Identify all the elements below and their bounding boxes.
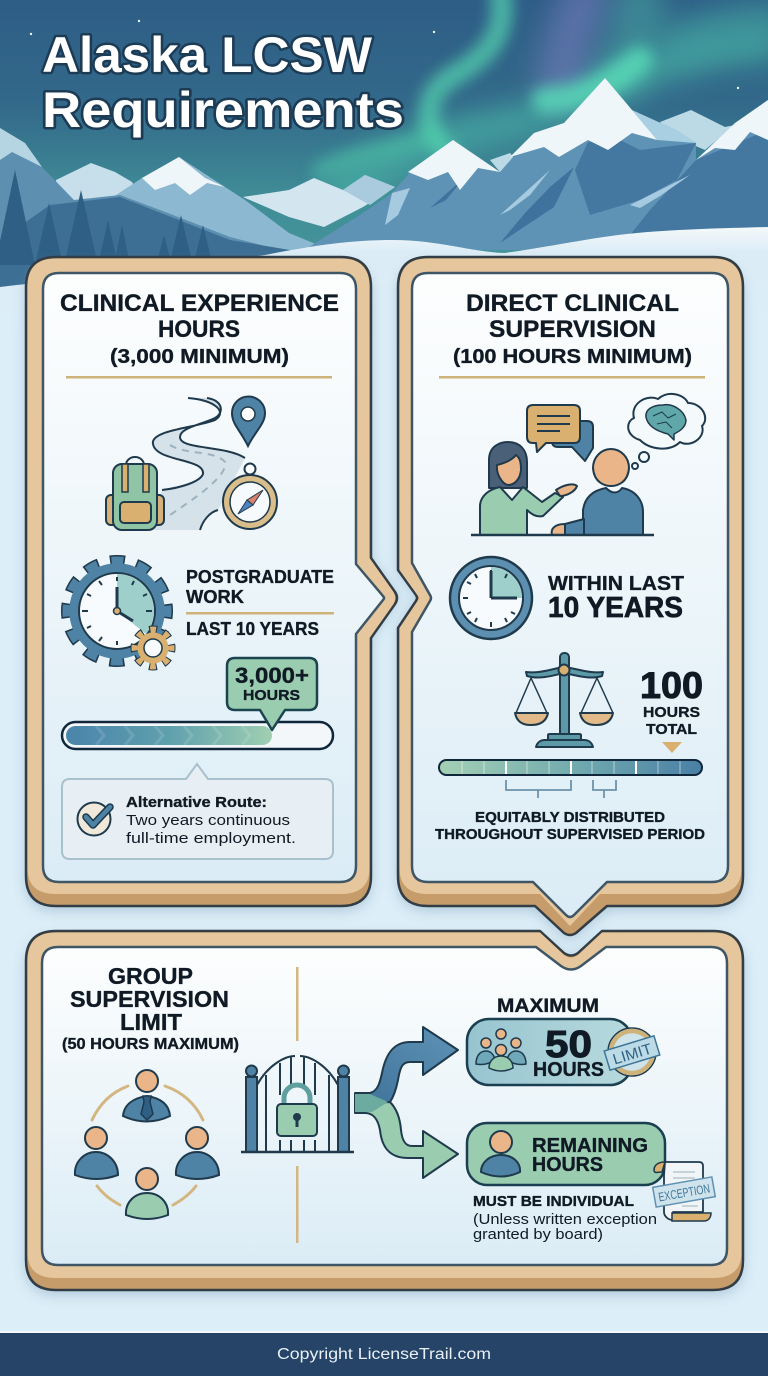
blue speech bubble	[552, 421, 593, 461]
callout: 3,000+ hours: HOURS	[243, 687, 300, 704]
heading: HOURS	[158, 316, 240, 343]
heading: (3,000 MINIMUM)	[110, 346, 289, 368]
callout: alternative route: Alternative Route:	[126, 794, 267, 811]
mid mountain	[0, 128, 330, 290]
panel: clinical experience hours	[26, 257, 399, 910]
thought cloud	[628, 394, 705, 449]
icon: wall clock	[450, 557, 532, 639]
icon: counselor and client conversation	[471, 394, 705, 535]
pill: 50 hours: 50	[545, 1024, 592, 1066]
icon: clock in gear	[68, 562, 171, 666]
equitably distributed text: THROUGHOUT SUPERVISED PERIOD	[435, 827, 705, 843]
brain	[646, 405, 686, 440]
stars	[30, 20, 739, 89]
postgraduate work text	[186, 567, 334, 639]
callout: 3,000+ hours	[227, 658, 317, 730]
stamp: limit: LIMIT	[611, 1040, 654, 1068]
heading: LIMIT	[120, 1009, 182, 1035]
pill: 50 hours	[467, 1019, 660, 1085]
icon: balance scale	[515, 653, 613, 747]
heading: GROUP	[108, 963, 193, 989]
callout: alternative route	[62, 764, 333, 859]
footer	[0, 1331, 768, 1376]
icon: winding trail with backpack, pin and compass	[106, 396, 277, 530]
icon: locked gate	[241, 1056, 354, 1152]
within last 10 years text: WITHIN LAST	[548, 573, 684, 595]
heading: CLINICAL EXPERIENCE	[60, 290, 339, 317]
100 hours total label: TOTAL	[646, 721, 697, 738]
title: Requirements	[42, 82, 404, 138]
within last 10 years text	[548, 573, 684, 624]
label: maximum: MAXIMUM	[497, 996, 599, 1017]
callout: alternative route: Two years continuous	[126, 812, 290, 829]
aurora	[320, 0, 768, 185]
panel: direct clinical supervision	[398, 257, 743, 941]
snow ground	[0, 227, 768, 340]
postgraduate work text: POSTGRADUATE	[186, 567, 334, 587]
man	[593, 449, 629, 486]
heading: (100 HOURS MINIMUM)	[453, 346, 692, 368]
heading: (50 HOURS MAXIMUM)	[62, 1036, 239, 1053]
callout: alternative route: full-time employment.	[126, 830, 296, 847]
heading: SUPERVISION	[70, 986, 229, 1012]
pill: remaining hours: REMAINING	[532, 1135, 648, 1157]
icon: exception scroll	[653, 1162, 715, 1221]
callout: 3,000+ hours: 3,000+	[235, 663, 309, 688]
distant mountains	[56, 110, 735, 227]
equitably distributed text	[435, 810, 705, 843]
must be individual text: (Unless written exception	[473, 1212, 657, 1228]
heading	[60, 290, 339, 368]
icon: check mark	[78, 802, 110, 836]
postgraduate work text: LAST 10 YEARS	[186, 619, 319, 639]
footer: Copyright LicenseTrail.com	[277, 1346, 491, 1363]
panel: group supervision limit	[26, 931, 743, 1294]
postgraduate work text: WORK	[186, 587, 244, 607]
pin	[232, 396, 265, 446]
icon: circle of people	[75, 1070, 219, 1219]
heading: DIRECT CLINICAL	[466, 290, 679, 317]
equitably distributed text: EQUITABLY DISTRIBUTED	[475, 810, 665, 826]
title: Alaska LCSW	[42, 27, 373, 83]
stamp: limit	[604, 1028, 660, 1076]
pill: remaining hours: HOURS	[532, 1154, 603, 1176]
compass	[223, 464, 277, 529]
must be individual text: MUST BE INDIVIDUAL	[473, 1194, 634, 1210]
must be individual text	[473, 1194, 657, 1243]
arrow: to 50 hours maximum	[355, 1027, 458, 1103]
woman	[489, 442, 527, 488]
arrow junction	[355, 1094, 388, 1112]
progress bar	[62, 722, 333, 749]
must be individual text: granted by board)	[473, 1227, 603, 1243]
100 hours total label: 100	[640, 665, 703, 706]
pine trees	[0, 170, 212, 265]
100 hours total label	[640, 665, 703, 753]
heading	[62, 963, 239, 1053]
backpack	[106, 457, 164, 530]
title	[42, 27, 404, 138]
icon: group of people	[476, 1029, 526, 1071]
within last 10 years text: 10 YEARS	[548, 592, 683, 624]
large mountains	[309, 78, 768, 250]
icon: individual person	[481, 1131, 520, 1176]
100 hours total label: HOURS	[643, 704, 700, 721]
heading: SUPERVISION	[489, 316, 656, 343]
heading	[453, 290, 692, 368]
pill: 50 hours: HOURS	[533, 1059, 604, 1081]
distribution bar	[439, 760, 702, 798]
icon: exception scroll: EXCEPTION	[657, 1182, 711, 1204]
arrow: to remaining hours	[355, 1102, 458, 1178]
pill: remaining hours	[467, 1123, 665, 1185]
tan speech bubble	[527, 405, 580, 452]
